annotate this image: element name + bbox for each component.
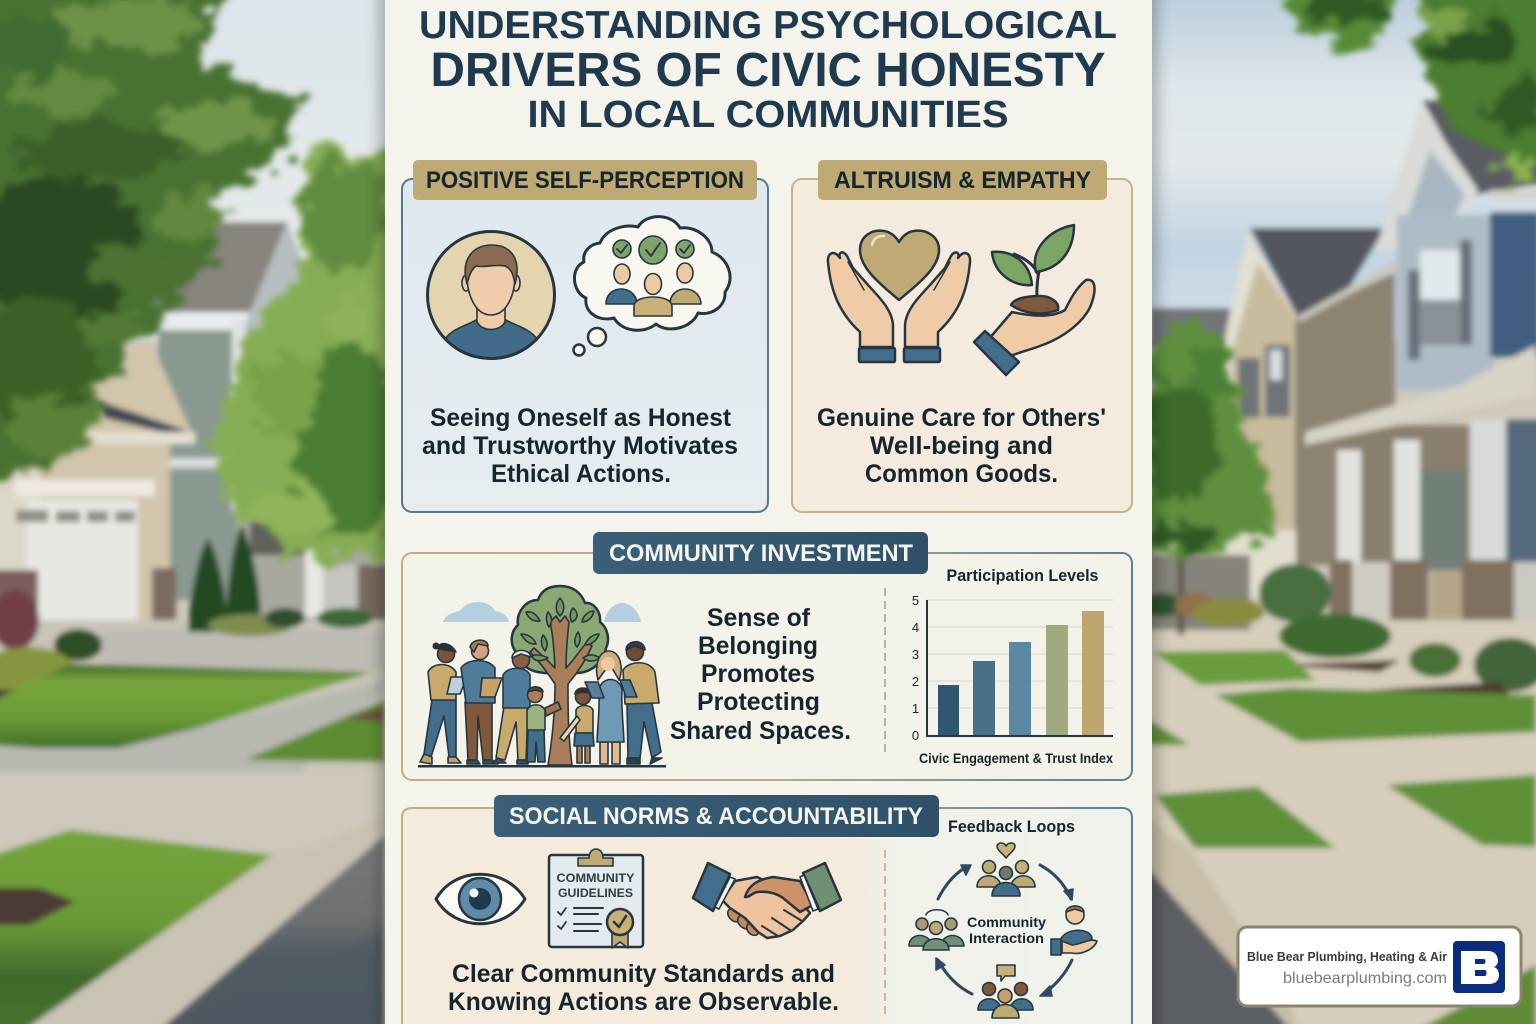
body text: clear standards: Clear Community Standards and [452,960,835,988]
body text: self-perception: and Trustworthy Motivates [422,432,738,460]
heading: positive self-perception: POSITIVE SELF-PERCEPTION [426,167,744,194]
title [419,4,1117,136]
logo badge: Blue Bear Plumbing: bluebearplumbing.com [1283,970,1447,987]
bar chart: participation levels: 0 [912,728,919,743]
panel: altruism and empathy [792,160,1132,512]
background: right tree foliage [1140,0,1536,560]
icon: community guidelines clipboard: COMMUNITY [556,871,634,885]
bar chart: participation levels: Civic Engagement & Trust Index [919,750,1113,766]
diagram: feedback loops [909,818,1097,1018]
illustration: people around a tree [418,586,666,768]
body text: altruism [817,404,1106,488]
icon: hand holding seedling [974,225,1094,375]
body text: clear standards: Knowing Actions are Observable. [448,988,839,1016]
icon: hands holding heart [828,231,970,362]
icon: thought cloud with community approval [574,217,730,356]
panel: positive self-perception [402,160,768,512]
body text: altruism: Well-being and [870,432,1053,460]
panel: social norms and accountability [402,795,1132,1024]
bar chart: participation levels: 5 [912,593,919,608]
bar chart: participation levels: 2 [912,674,919,689]
body text: sense of belonging: Shared Spaces. [670,717,851,745]
body text: self-perception [422,404,738,488]
background photo: left suburban street [0,0,410,1024]
heading: social norms and accountability: SOCIAL NORMS & ACCOUNTABILITY [509,803,923,830]
title: UNDERSTANDING PSYCHOLOGICAL [419,4,1117,47]
body text: sense of belonging: Promotes [701,660,815,688]
icon: person portrait [428,232,554,359]
icon: handshake [693,863,841,938]
title: DRIVERS OF CIVIC HONESTY [430,44,1106,97]
heading: social norms and accountability [494,795,939,837]
body text: sense of belonging: Sense of [707,604,811,632]
bar chart: participation levels: 4 [912,620,919,635]
diagram: feedback loops: Feedback Loops [948,818,1075,836]
logo badge: Blue Bear Plumbing: Blue Bear Plumbing, Heating & Air [1247,950,1447,964]
bar chart: participation levels [912,567,1113,766]
body text: sense of belonging [670,604,851,745]
heading: community investment [593,532,928,574]
body text: sense of belonging: Belonging [698,632,818,660]
body text: self-perception: Seeing Oneself as Honest [430,404,732,432]
icon: B logo [1453,941,1505,993]
bar chart: participation levels: Participation Levels [946,567,1098,585]
body text: altruism: Common Goods. [865,460,1058,488]
icon: community guidelines clipboard: GUIDELINES [558,886,633,900]
title: IN LOCAL COMMUNITIES [528,94,1008,136]
body text: sense of belonging: Protecting [697,688,820,716]
background: left tree foliage [0,0,410,560]
logo badge: Blue Bear Plumbing [1238,927,1521,1006]
body text: altruism: Genuine Care for Others' [817,404,1106,432]
panel: community investment [402,532,1132,780]
heading: positive self-perception [413,160,757,200]
diagram: feedback loops: Community [967,914,1046,930]
background photo: right suburban houses [1140,0,1536,1024]
body text: clear standards [448,960,839,1016]
icon: eye [436,874,525,924]
diagram: feedback loops: Interaction [969,930,1044,946]
poster panel [378,0,1159,1024]
heading: community investment: COMMUNITY INVESTMENT [609,540,913,567]
heading: altruism and empathy [818,160,1107,200]
body text: self-perception: Ethical Actions. [491,460,671,488]
bar chart: participation levels: 1 [912,701,919,716]
heading: altruism and empathy: ALTRUISM & EMPATHY [834,167,1091,194]
icon: community guidelines clipboard [549,849,643,948]
bar chart: participation levels: 3 [912,647,919,662]
